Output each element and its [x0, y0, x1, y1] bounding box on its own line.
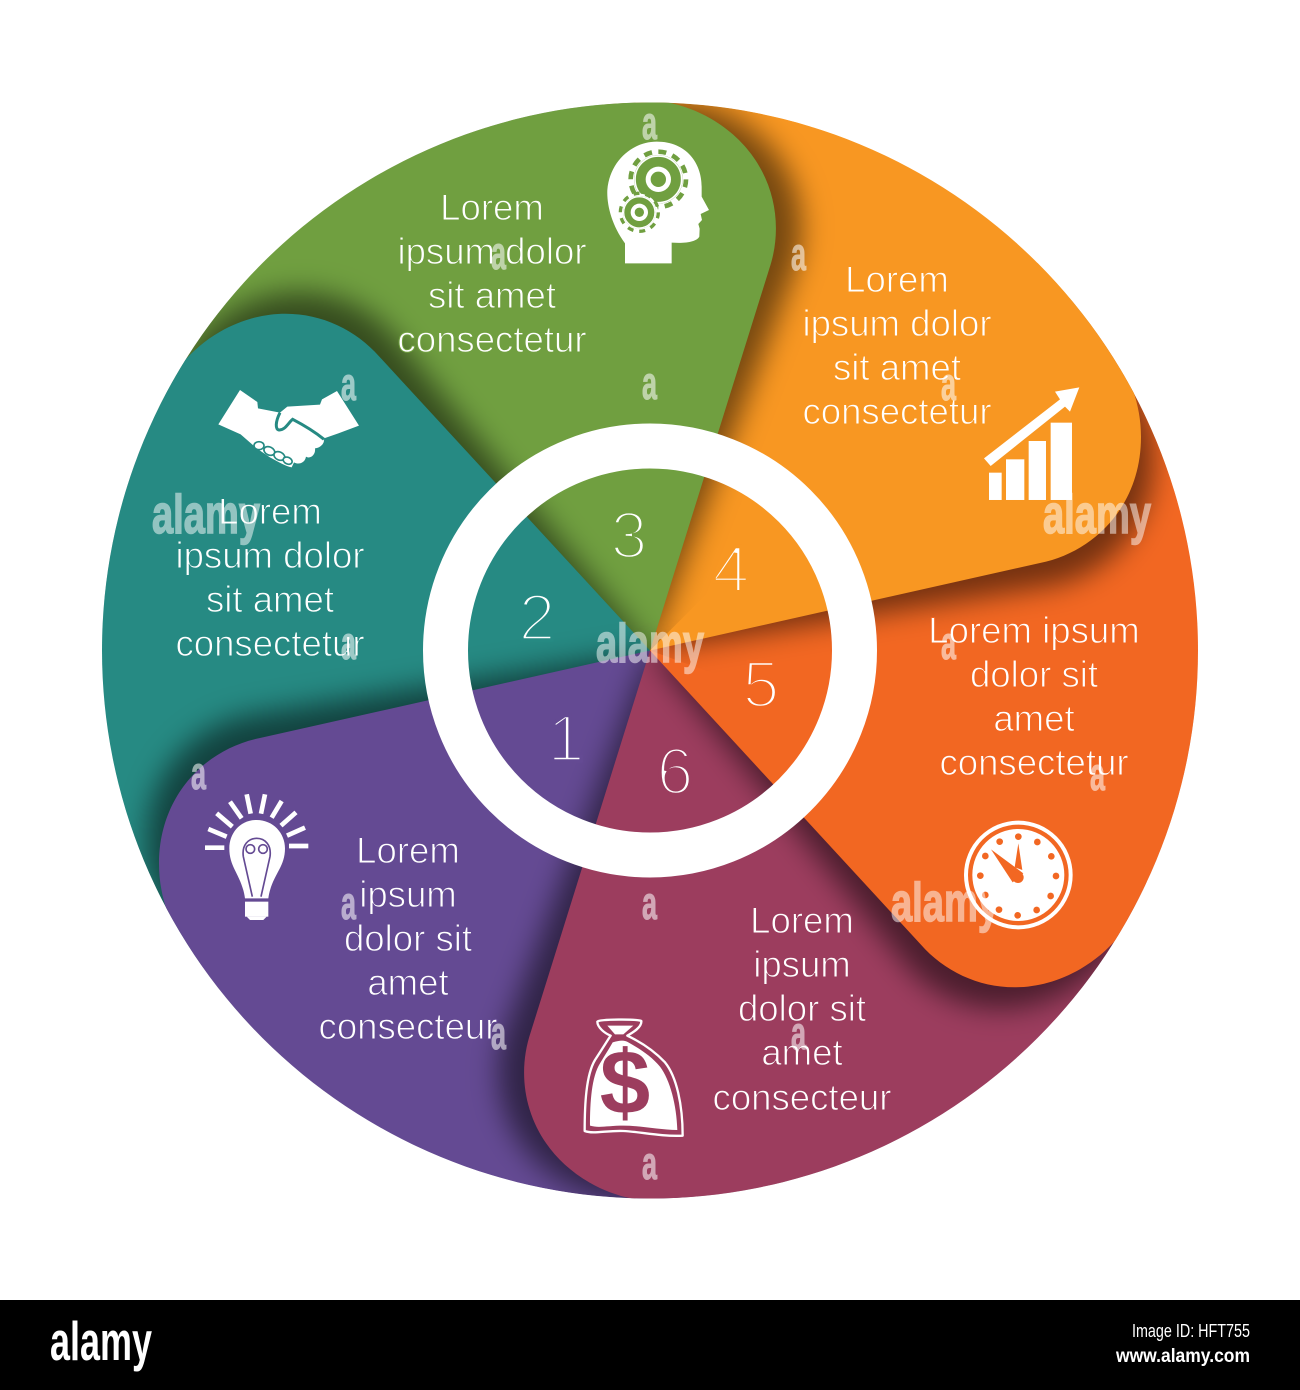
text block: orange: ipsum dolor — [802, 303, 992, 344]
shadow of panel 1 — [131, 621, 650, 1124]
numeral 4: 4 — [713, 532, 749, 606]
watermarks — [152, 97, 1151, 1189]
text block: orange: consectetur — [802, 391, 992, 432]
text block: purple: amet — [367, 962, 449, 1003]
watermarks: alamy — [1043, 483, 1151, 545]
shadow of panel 3 — [406, 102, 822, 650]
panel 3: green — [154, 102, 776, 650]
text block: purple — [319, 830, 497, 1047]
text block: teal: consectetur — [175, 623, 365, 664]
text block: orange-red — [928, 610, 1140, 783]
panel 5: orange-red — [650, 336, 1198, 988]
text block: maroon: consecteur — [713, 1077, 891, 1118]
watermarks: a — [341, 617, 356, 669]
footer bar — [0, 1300, 1300, 1390]
numeral 6: 6 — [657, 734, 693, 808]
numeral 3: 3 — [611, 498, 647, 572]
shadow of panel 4 — [650, 298, 1172, 664]
numeral 5: 5 — [743, 647, 779, 721]
text block: maroon: dolor sit — [738, 988, 866, 1029]
panel 6: maroon — [524, 650, 1146, 1198]
website: www.alamy.com — [1115, 1346, 1250, 1367]
petals — [102, 102, 1198, 1198]
watermarks: a — [642, 97, 657, 149]
text block: teal — [175, 491, 365, 664]
text block: green: sit amet — [428, 275, 556, 316]
watermarks: a — [191, 747, 206, 799]
text block: green — [397, 187, 587, 360]
watermarks: a — [941, 358, 956, 410]
numeral 1: 1 — [548, 701, 584, 775]
text block: green: Lorem — [440, 187, 544, 228]
shadow of panel 6 — [482, 648, 893, 1198]
text block: purple: Lorem — [356, 830, 460, 871]
numeral 2: 2 — [519, 580, 555, 654]
text block: teal: ipsum dolor — [175, 535, 365, 576]
text block: maroon: amet — [761, 1032, 843, 1073]
text block: maroon: Lorem — [750, 900, 854, 941]
dollar sign: $ — [600, 1032, 650, 1133]
text block: maroon — [713, 900, 891, 1118]
watermarks: a — [491, 1007, 506, 1059]
watermarks: a — [341, 358, 356, 410]
footer logo: alamy — [50, 1310, 152, 1372]
watermarks: a — [642, 877, 657, 929]
text block: orange: Lorem — [845, 259, 949, 300]
icon: growth chart — [984, 387, 1079, 500]
text block: orange — [802, 259, 992, 432]
shadow of panel 5 — [646, 639, 1197, 1026]
text block: green: consectetur — [397, 319, 587, 360]
panel 1: purple — [159, 650, 698, 1199]
shadow of panel 2 — [103, 276, 653, 650]
panel 4: orange base — [602, 102, 1141, 651]
icon: handshake — [218, 390, 359, 467]
watermarks: a — [1090, 748, 1105, 800]
text block: orange-red: dolor sit — [970, 654, 1098, 695]
watermarks: a — [642, 1137, 657, 1189]
watermarks: a — [642, 357, 657, 409]
text block: purple: consecteur — [319, 1006, 497, 1047]
watermarks: a — [341, 877, 356, 929]
watermarks: a — [791, 228, 806, 280]
text block: purple: ipsum — [359, 874, 457, 915]
text block: orange-red: Lorem ipsum — [928, 610, 1140, 651]
text block: teal: Lorem — [218, 491, 322, 532]
text block: green: ipsum dolor — [397, 231, 587, 272]
panel 4: orange overlap — [650, 263, 1141, 650]
icon: light bulb — [205, 794, 308, 920]
text block: purple: dolor sit — [344, 918, 472, 959]
watermarks: a — [941, 617, 956, 669]
text block: orange-red: consectetur — [939, 742, 1129, 783]
circular diagram — [102, 102, 1198, 1198]
text block: maroon: ipsum — [753, 944, 851, 985]
watermarks: a — [491, 227, 506, 279]
image id: Image ID: HFT755 — [1132, 1321, 1250, 1341]
text block: orange-red: amet — [993, 698, 1075, 739]
icon: clock — [964, 821, 1073, 929]
watermarks: alamy — [891, 871, 999, 933]
icon: money bag — [585, 1020, 683, 1136]
icon: head with gears — [607, 142, 709, 263]
text block: teal: sit amet — [206, 579, 334, 620]
watermarks: alamy — [152, 483, 260, 545]
white centre ring — [446, 446, 854, 855]
panel 2: teal — [102, 314, 650, 965]
watermarks: alamy — [596, 612, 704, 674]
text block: orange: sit amet — [833, 347, 961, 388]
watermarks: a — [791, 1007, 806, 1059]
